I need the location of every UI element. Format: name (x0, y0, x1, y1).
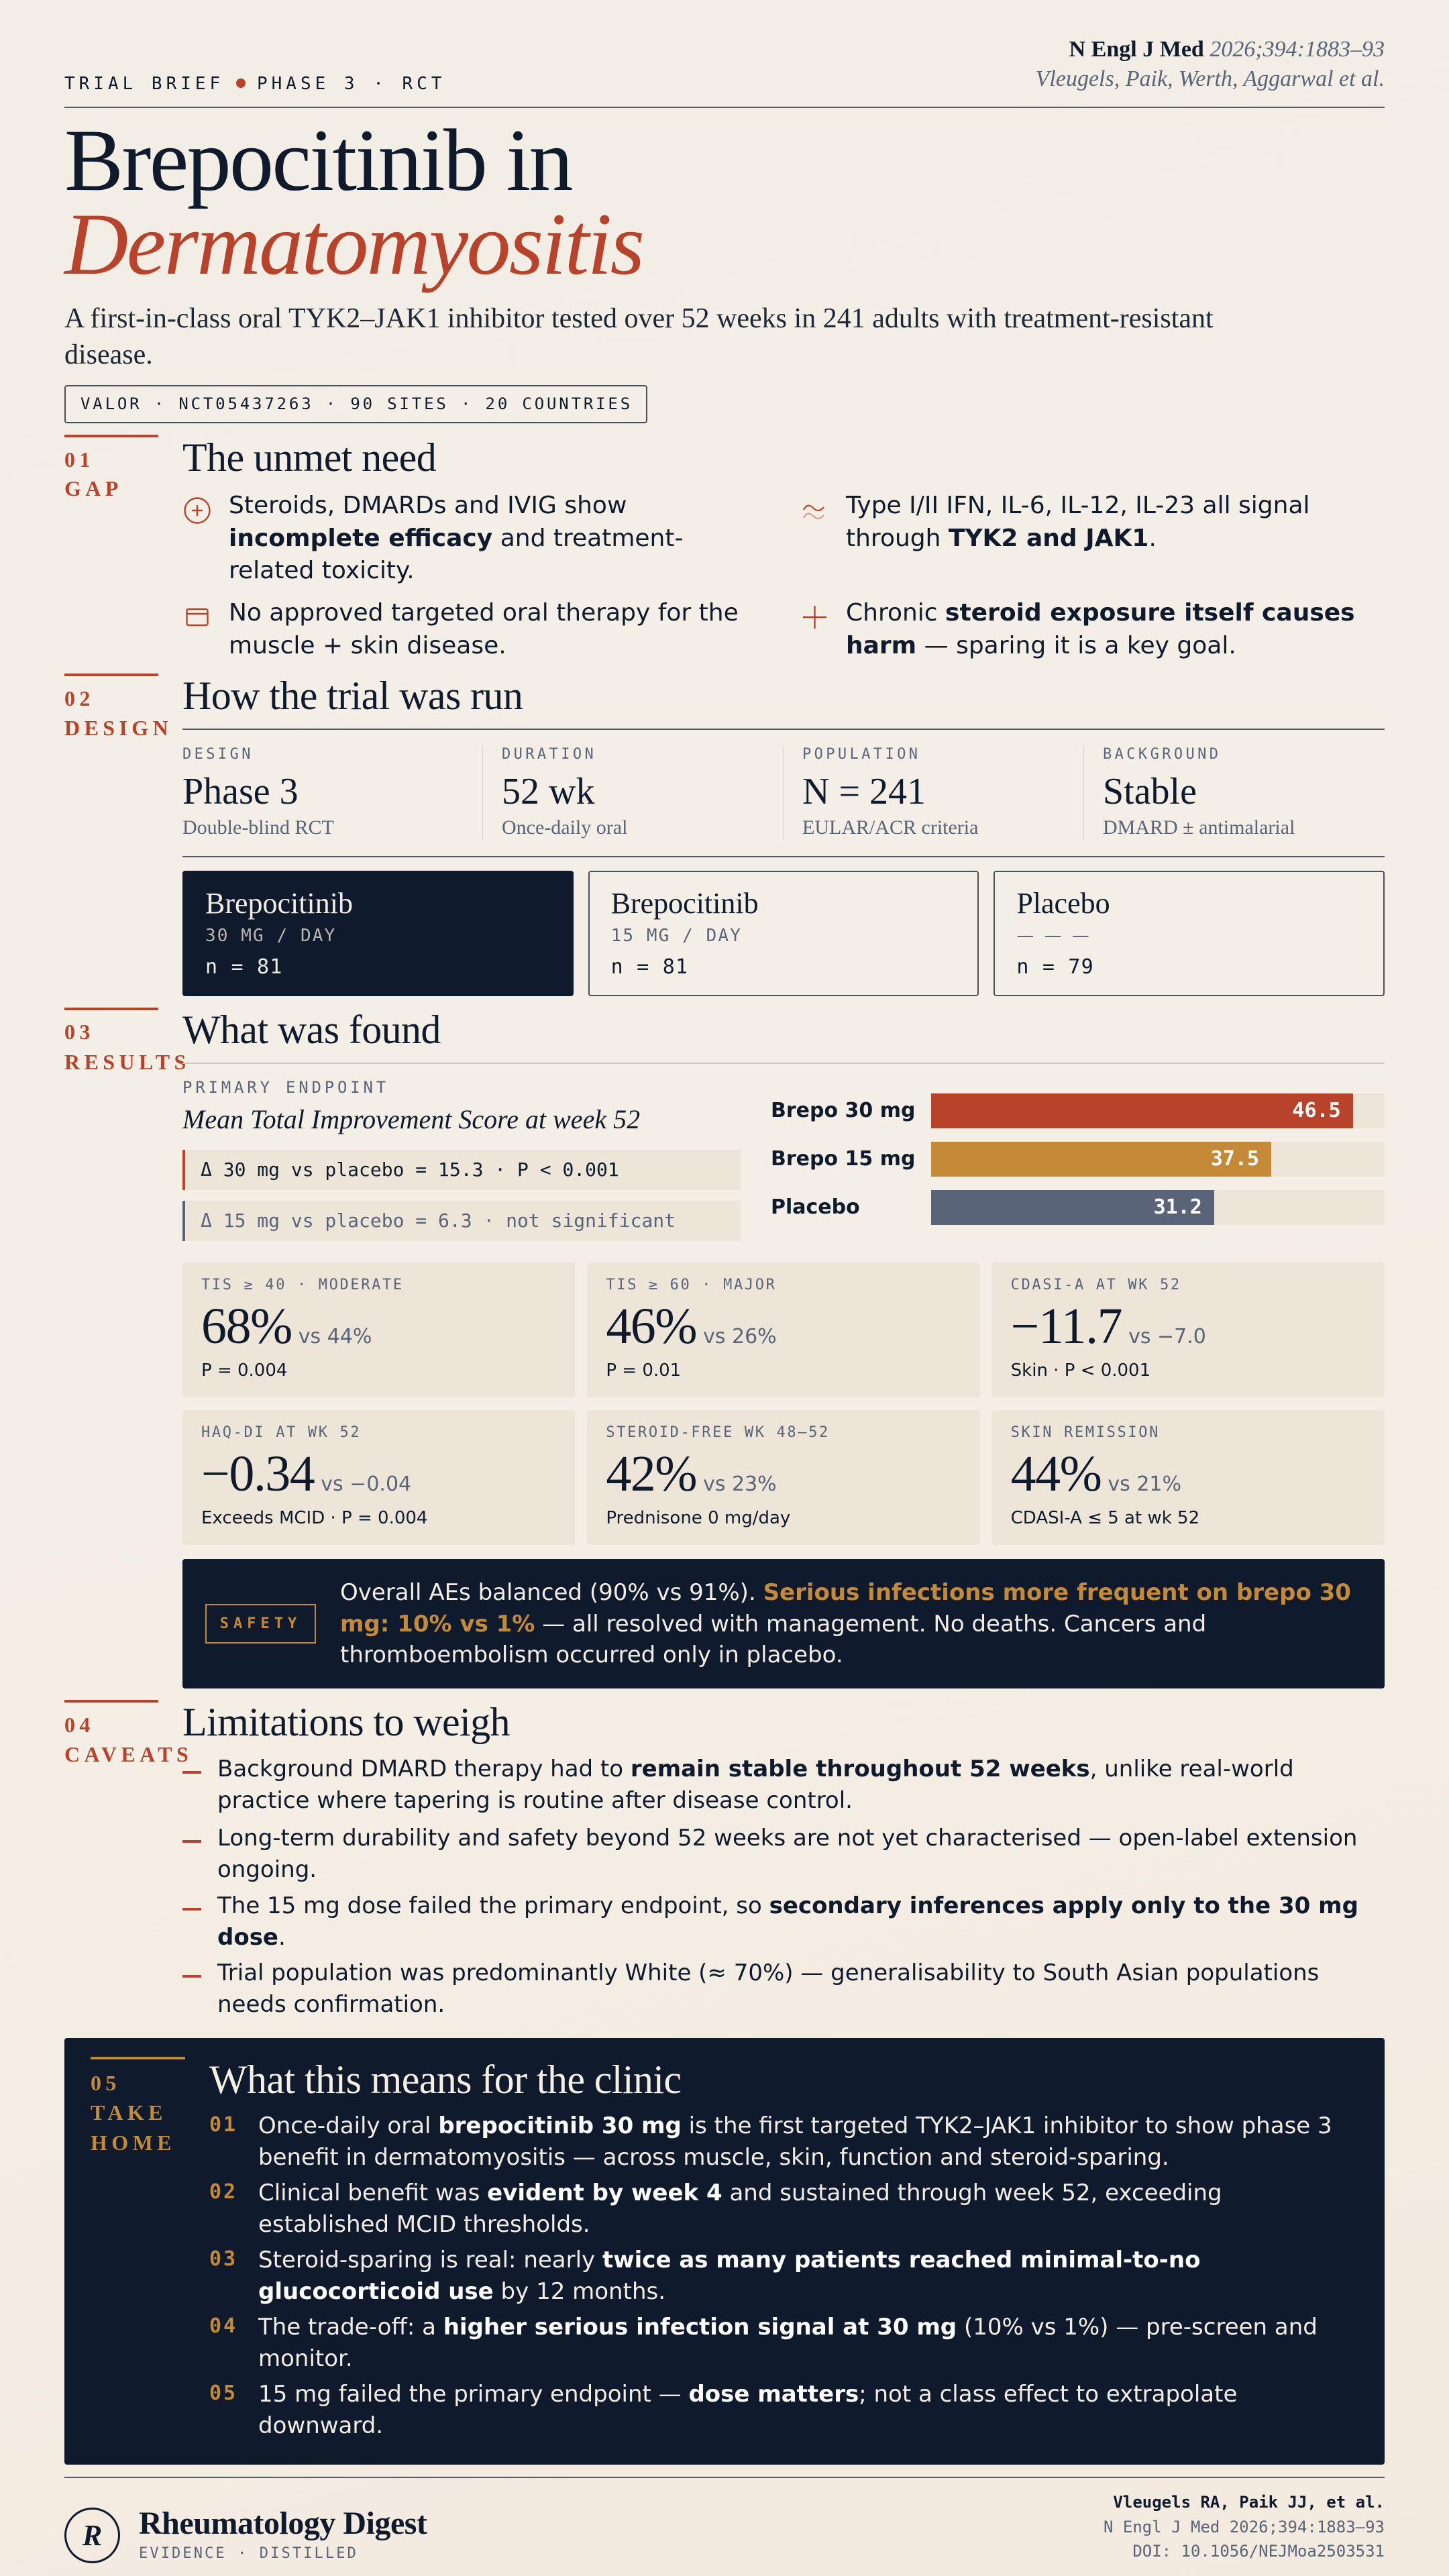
stat: TIS 60: P = 0.01 (606, 1360, 681, 1381)
arm: 30 mg (182, 871, 574, 996)
section tag 03 results: RESULTS (64, 1050, 191, 1074)
caveat 2: Long-term durability and safety beyond 52 weeks are not yet characterised — open-label extension (217, 1825, 1357, 1851)
section tag 04 caveats: CAVEATS (64, 1742, 193, 1766)
icon: plus (803, 606, 826, 629)
title (63, 111, 643, 293)
masthead kicker (64, 74, 445, 94)
metric: design: Phase 3 (182, 771, 299, 812)
bar: brepo 30 mg: Brepo 30 mg (771, 1099, 915, 1122)
bar chart (771, 1093, 1385, 1225)
caveat 2: ongoing. (217, 1856, 317, 1882)
takeaway 3 (209, 2247, 1200, 2305)
section tag 02 design (64, 686, 172, 740)
heading: how the trial was run: How the trial was run (182, 674, 523, 718)
safety text: mg: 10% vs 1% — all resolved with management. No deaths. Cancers and (340, 1610, 1206, 1637)
metric: design: DESIGN (182, 746, 254, 763)
takeaway 4: The trade-off: a higher serious infection signal at 30 mg (10% vs 1%) — pre-screen and (258, 2314, 1318, 2341)
takeaway 2: 02 (209, 2180, 237, 2204)
stat: HAQ-DI (182, 1410, 575, 1545)
caveat 4: needs confirmation. (217, 1991, 445, 2018)
stat: HAQ-DI: HAQ-DI AT WK 52 (201, 1424, 361, 1441)
icon: card (186, 608, 209, 627)
stat: CDASI-A: CDASI-A AT WK 52 (1011, 1277, 1181, 1293)
safety tag (205, 1604, 316, 1644)
stat: steroid-free (587, 1410, 980, 1545)
takeaway 4 (209, 2314, 1318, 2372)
caveat 4 (182, 1960, 1319, 2018)
metric: background: Stable (1103, 771, 1197, 812)
takeaway 1: 01 (209, 2113, 237, 2137)
subtitle: disease. (64, 339, 153, 370)
takeaway 3: Steroid-sparing is real: nearly twice as many patients reached minimal-to-no (258, 2247, 1200, 2273)
takeaway 4: monitor. (258, 2345, 353, 2372)
stat: HAQ-DI: −0.34 vs −0.04 (201, 1446, 411, 1502)
item: no approved therapy (186, 599, 739, 659)
masthead kicker: TRIAL BRIEF (64, 74, 224, 94)
stat: CDASI-A: Skin · P < 0.001 (1011, 1360, 1150, 1381)
stat: steroid-free: Prednisone 0 mg/day (606, 1508, 790, 1528)
item: cytokine signalling: Type I/II IFN, IL-6, IL-12, IL-23 all signal (846, 492, 1310, 519)
arm: 15 mg: 15 MG / DAY (611, 926, 742, 946)
icon: R logo (64, 2508, 120, 2563)
delta: 30 mg: Δ 30 mg vs placebo = 15.3 · P < 0.001 (201, 1159, 619, 1181)
item: incomplete efficacy (184, 492, 683, 584)
caveat 3 (182, 1892, 1358, 1951)
stat: skin remission: SKIN REMISSION (1011, 1424, 1160, 1441)
item: steroid harm: Chronic steroid exposure itself causes (846, 599, 1355, 627)
bar: brepo 30 mg: 46.5 (1292, 1099, 1341, 1122)
metric: duration: Once-daily oral (502, 816, 627, 839)
bar: brepo 15 mg: Brepo 15 mg (771, 1147, 915, 1171)
metric: background: DMARD ± antimalarial (1103, 816, 1295, 839)
caveat 3: The 15 mg dose failed the primary endpoint, so secondary inferences apply only to the 30 mg (217, 1892, 1358, 1919)
takeaway 2: Clinical benefit was evident by week 4 and sustained through week 52, exceeding (258, 2180, 1222, 2206)
trial metrics (182, 746, 1295, 840)
panel: 02 trial design (64, 674, 1385, 996)
bar: brepo 30 mg (771, 1093, 1385, 1128)
subtitle: A first-in-class oral TYK2–JAK1 inhibitor tested over 52 weeks in 241 adults with treatment-resistant (64, 303, 1214, 334)
footer citation: Vleugels RA, Paik JJ, et al. (1113, 2493, 1385, 2512)
stat: TIS 60 (587, 1263, 980, 1397)
section tag 02 design: 02 (64, 686, 95, 710)
metric: background (1103, 746, 1295, 839)
bar: placebo: 31.2 (1154, 1195, 1202, 1219)
takeaway 4: 04 (209, 2314, 237, 2338)
arm: 30 mg: Brepocitinib (205, 887, 353, 920)
icon: R logo: R (83, 2519, 102, 2552)
bar: brepo 15 mg (771, 1142, 1385, 1177)
stat: skin remission: 44% vs 21% (1011, 1446, 1181, 1502)
metric: duration (483, 746, 784, 840)
caveat 1 (182, 1756, 1294, 1814)
metric: population: EULAR/ACR criteria (802, 816, 978, 839)
metric: duration: DURATION (502, 746, 596, 763)
treatment arms (182, 871, 1385, 996)
safety text: Overall AEs balanced (90% vs 91%). Serious infections more frequent on brepo 30 (340, 1579, 1351, 1606)
item: cytokine signalling: through TYK2 and JAK1. (846, 525, 1157, 552)
section tag 02 design: DESIGN (64, 716, 172, 740)
item: cytokine signalling (803, 492, 1310, 552)
stat: TIS 60: TIS ≥ 60 · MAJOR (606, 1277, 777, 1293)
section tag 01 gap (64, 447, 123, 500)
masthead kicker: PHASE 3 · RCT (257, 74, 445, 94)
stat: skin remission (992, 1410, 1385, 1545)
citation: Vleugels, Paik, Werth, Aggarwal et al. (1036, 66, 1385, 91)
takeaway 2: established MCID thresholds. (258, 2211, 590, 2238)
arm: 15 mg: n = 81 (611, 955, 688, 979)
takeaway 3: 03 (209, 2247, 237, 2271)
delta: 30 mg (182, 1150, 741, 1190)
trial badge (64, 385, 647, 423)
heading: limitations: Limitations to weigh (182, 1700, 510, 1744)
panel: 03 results (64, 1008, 1385, 1688)
item: incomplete efficacy: Steroids, DMARDs and IVIG show (229, 492, 627, 519)
safety tag: SAFETY (220, 1615, 301, 1632)
safety text: thromboembolism occurred only in placebo. (340, 1642, 843, 1668)
section tag 05 take home: TAKE (91, 2100, 167, 2125)
title: Brepocitinib in (64, 111, 572, 209)
section tag 01 gap: GAP (64, 476, 123, 500)
takeaway 3: glucocorticoid use by 12 months. (258, 2278, 665, 2305)
section tag 05 take home: HOME (91, 2131, 176, 2155)
arm: 15 mg: Brepocitinib (611, 887, 759, 920)
takeaway 5: 15 mg failed the primary endpoint — dose matters; not a class effect to extrapolate (258, 2381, 1237, 2408)
section tag 01 gap: 01 (64, 447, 95, 472)
metric: design: Double-blind RCT (182, 816, 334, 839)
icon: waves (803, 504, 824, 519)
caveat 3: dose. (217, 1924, 286, 1951)
takeaway 1: Once-daily oral brepocitinib 30 mg is the first targeted TYK2–JAK1 inhibitor to show phase 3 (258, 2112, 1332, 2139)
caveat 1: practice where tapering is routine after disease control. (217, 1787, 853, 1814)
caveat 2 (182, 1825, 1357, 1882)
metric: design (182, 746, 483, 840)
safety callout (182, 1559, 1385, 1688)
footer citation: DOI: 10.1056/NEJMoa2503531 (1132, 2542, 1385, 2561)
takeaway 5 (209, 2381, 1237, 2439)
heading: what was found: What was found (182, 1008, 441, 1052)
panel: 04 caveats (64, 1700, 1358, 2018)
stat: HAQ-DI: Exceeds MCID · P = 0.004 (201, 1508, 427, 1528)
trial badge: VALOR · NCT05437263 · 90 SITES · 20 COUNTRIES (80, 394, 633, 413)
safety text (340, 1579, 1351, 1668)
stat: TIS 40: 68% vs 44% (201, 1298, 372, 1354)
masthead rule (64, 107, 1385, 108)
panel: 05 take home (64, 2038, 1385, 2465)
footer citation: N Engl J Med 2026;394:1883–93 (1104, 2517, 1385, 2536)
takeaway 2 (209, 2180, 1222, 2238)
arm: placebo (994, 871, 1385, 996)
takeaway 5: downward. (258, 2412, 383, 2439)
stat: skin remission: CDASI-A ≤ 5 at wk 52 (1011, 1508, 1199, 1528)
metric: population: POPULATION (802, 746, 920, 763)
stat: CDASI-A: −11.7 vs −7.0 (1011, 1298, 1206, 1354)
bar: brepo 15 mg: 37.5 (1211, 1147, 1259, 1171)
item: no approved therapy: No approved targeted oral therapy for the (229, 599, 739, 627)
arm: placebo: — — — (1016, 926, 1091, 946)
icon: circled plus (184, 497, 211, 524)
caveat 4: Trial population was predominantly White (≈ 70%) — generalisability to South Asian populations (217, 1960, 1319, 1986)
arm: 15 mg (588, 871, 979, 996)
section tag 03 results: 03 (64, 1020, 95, 1044)
delta: 15 mg (182, 1201, 741, 1241)
metric: population: N = 241 (802, 771, 926, 812)
item: no approved therapy: muscle + skin disease. (229, 632, 506, 659)
arm: placebo: Placebo (1016, 887, 1110, 920)
citation (1036, 37, 1385, 91)
bar: placebo: Placebo (771, 1195, 860, 1219)
stat: TIS 40 (182, 1263, 575, 1397)
metric: population (784, 746, 1084, 840)
stat: CDASI-A (992, 1263, 1385, 1397)
section tag 03 results (64, 1020, 191, 1074)
arm: placebo: n = 79 (1016, 955, 1094, 979)
primary endpoint summary (182, 1078, 741, 1241)
takeaway 1 (209, 2112, 1332, 2171)
primary endpoint summary: Mean Total Improvement Score at week 52 (182, 1104, 640, 1134)
footer brand: Rheumatology Digest (139, 2506, 427, 2541)
metric: duration: 52 wk (502, 771, 594, 812)
section tag 05 take home: 05 (91, 2071, 121, 2095)
stat: TIS 40: TIS ≥ 40 · MODERATE (201, 1277, 404, 1293)
stat: steroid-free: 42% vs 23% (606, 1446, 777, 1502)
primary endpoint summary: PRIMARY ENDPOINT (182, 1078, 389, 1097)
panel: 01 unmet need (64, 435, 1355, 659)
bar: placebo (771, 1190, 1385, 1225)
takeaway 5: 05 (209, 2381, 237, 2405)
title: Dermatomyositis (64, 195, 643, 293)
item: steroid harm: harm — sparing it is a key goal. (846, 632, 1236, 659)
takeaway 1: benefit in dermatomyositis — across muscle, skin, function and steroid-sparing. (258, 2144, 1169, 2171)
heading: clinic: What this means for the clinic (209, 2057, 681, 2102)
item: incomplete efficacy: related toxicity. (229, 557, 415, 584)
stat: steroid-free: STEROID-FREE WK 48–52 (606, 1424, 830, 1441)
subtitle (64, 303, 1214, 370)
section tag 04 caveats: 04 (64, 1713, 95, 1737)
arm: 30 mg: 30 MG / DAY (205, 926, 336, 946)
section tag 04 caveats (64, 1713, 193, 1766)
citation: N Engl J Med 2026;394:1883–93 (1069, 37, 1385, 62)
caveat 1: Background DMARD therapy had to remain stable throughout 52 weeks, unlike real-world (217, 1756, 1294, 1782)
footer brand: EVIDENCE · DISTILLED (139, 2545, 358, 2562)
heading: the unmet need: The unmet need (182, 435, 436, 480)
footer citation (979, 2490, 1385, 2567)
metric: background: BACKGROUND (1103, 746, 1221, 763)
stat: TIS 40: P = 0.004 (201, 1360, 287, 1381)
arm: 30 mg: n = 81 (205, 955, 283, 979)
footer brand (64, 2508, 427, 2564)
stat cards (182, 1263, 1385, 1545)
section tag 05 take home (91, 2071, 176, 2155)
delta: 15 mg: Δ 15 mg vs placebo = 6.3 · not significant (201, 1210, 676, 1232)
item: incomplete efficacy: incomplete efficacy and treatment- (229, 525, 683, 552)
item: steroid harm (803, 599, 1355, 659)
stat: TIS 60: 46% vs 26% (606, 1298, 777, 1354)
